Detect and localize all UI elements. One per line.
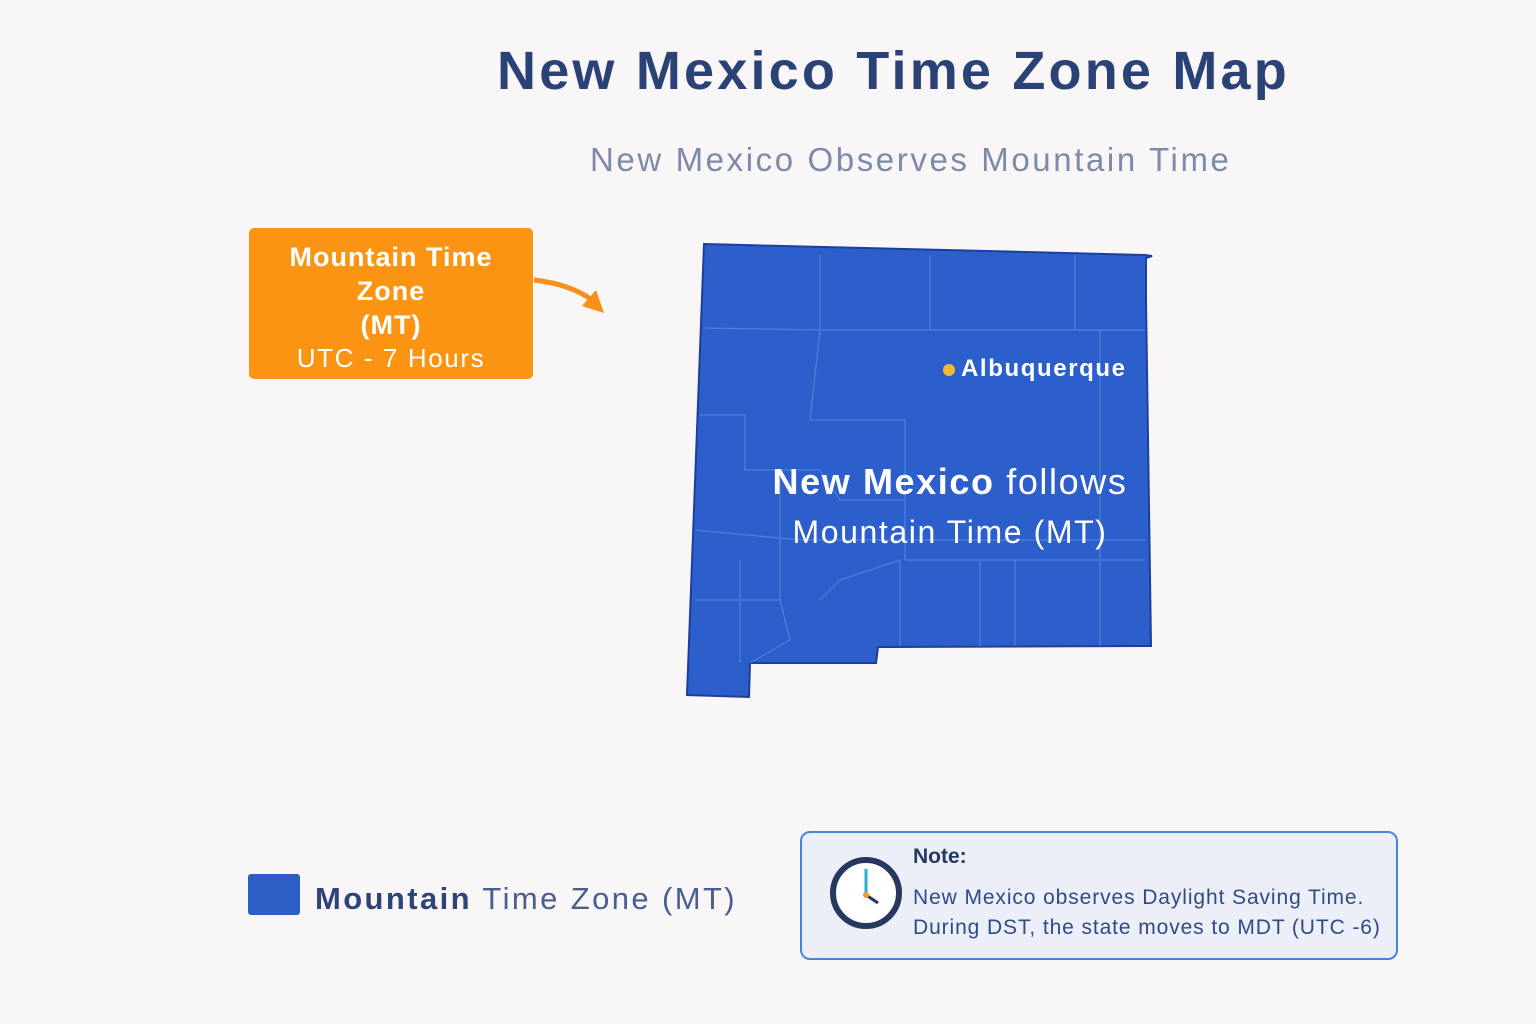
callout: mountain time zone: Mountain Time (289, 242, 492, 272)
map text: New Mexico follows (773, 461, 1127, 502)
title: New Mexico Time Zone Map (497, 41, 1290, 101)
icon: clock (830, 857, 902, 929)
callout: mountain time zone: UTC - 7 Hours (297, 343, 485, 373)
callout: mountain time zone: (MT) (361, 310, 421, 340)
note box (800, 831, 1398, 960)
note box: Note: (913, 845, 967, 868)
arrow: callout to map (534, 278, 604, 313)
note box: New Mexico observes Daylight Saving Time. (913, 886, 1364, 909)
note box: During DST, the state moves to MDT (UTC -6) (913, 916, 1381, 939)
legend: Mountain Time Zone (MT) (315, 881, 737, 916)
map text (773, 461, 1127, 550)
subtitle: New Mexico Observes Mountain Time (590, 141, 1232, 178)
callout: mountain time zone (249, 228, 533, 379)
label: Albuquerque: Albuquerque (961, 355, 1127, 382)
map text: Mountain Time (MT) (792, 514, 1108, 550)
callout: mountain time zone: Zone (357, 276, 425, 306)
